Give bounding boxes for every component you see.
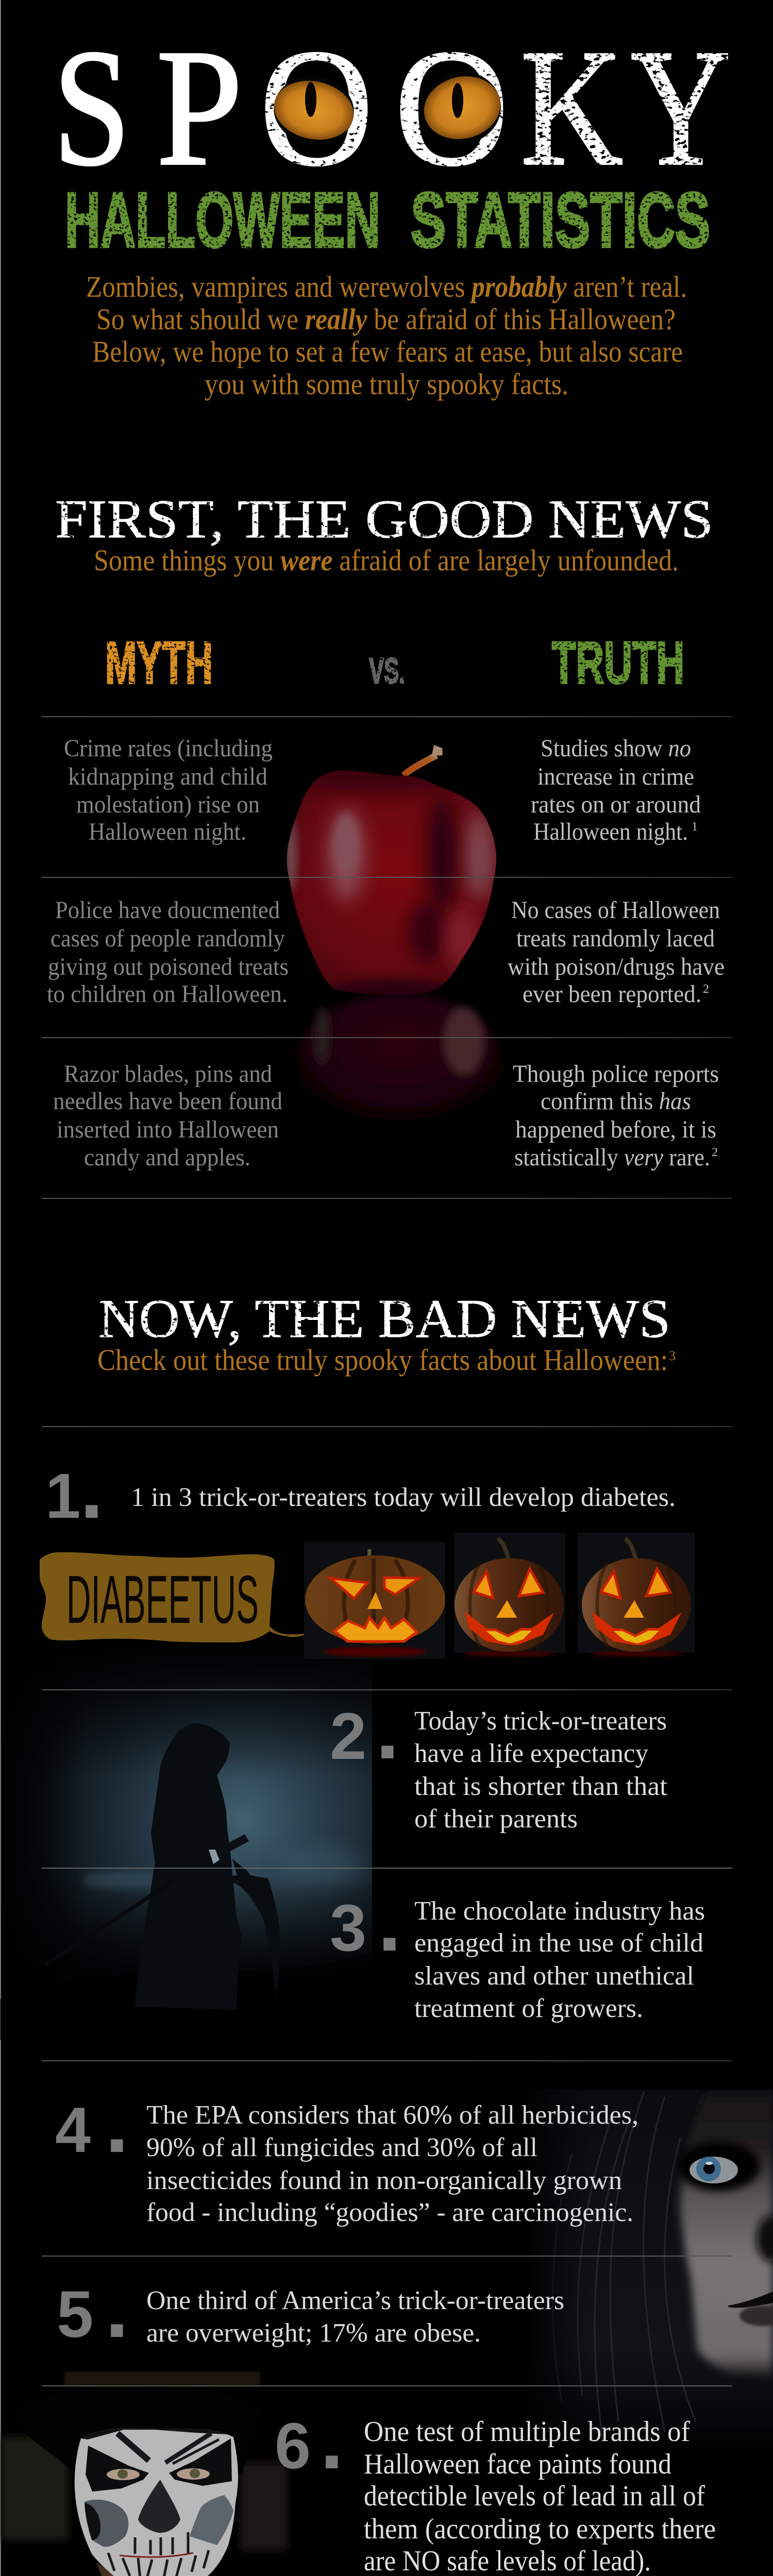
title: SPOOKY: Y [631,15,731,200]
illustration: apple reflection [296,993,502,1132]
fact 2 text: have a life expectancy [414,1739,648,1768]
fact 2 text: that is shorter than that [414,1772,668,1801]
panel: myth vs truth row 1: Halloween night. [89,818,246,845]
fact 3 number: 3 [330,1891,366,1965]
fact 5 text [146,2286,564,2348]
title: SPOOKY: K [520,15,623,200]
fact 6 text [364,2416,716,2576]
fact 4 number: . [105,2075,129,2170]
fact 3 number: . [378,1874,401,1969]
panel: myth vs truth row 2: treats randomly laced [516,925,715,952]
fact 6 text: detectible levels of lead in all of [364,2480,705,2512]
fact 6 text: them (according to experts there [364,2513,716,2545]
panel: myth vs truth row 2: cases of people randomly [51,925,285,952]
subheading: bad news: 3 [669,1348,676,1363]
icon: right cat eye [417,66,507,149]
fact 2 text: of their parents [414,1804,578,1834]
fact 3 number [330,1874,401,1969]
fact 3 text: engaged in the use of child [414,1928,703,1958]
fact 4 number [55,2075,129,2170]
title: SPOOKY: P [156,15,243,200]
panel: myth vs truth row 3: statistically very rare. [514,1144,710,1171]
panel: myth vs truth row 1: Studies show no [541,735,691,762]
title: SPOOKY: O [395,15,509,200]
panel: myth vs truth row 1 [64,735,701,845]
illustration: pumpkin 2 [454,1533,565,1657]
panel: myth vs truth row 1: Crime rates (including [64,735,273,762]
intro text: So what should we really be afraid of this Halloween? [96,302,676,336]
panel: myth vs truth row 3: Razor blades, pins and [64,1060,272,1088]
illustration: woman's face photo [528,2090,773,2458]
intro text: you with some truly spooky facts. [205,367,568,401]
fact 3 text [414,1896,705,2023]
fact 5 number: 5 [57,2278,93,2351]
illustration: skull face paint photo [1,2371,288,2576]
panel: myth vs truth row 1: 1 [692,820,698,834]
panel: myth vs truth row 1: rates on or around [531,791,701,818]
heading: first, the good news: FIRST, THE GOOD NEWS [55,489,713,549]
illustration: pumpkin 1 [304,1542,445,1659]
panel: myth vs truth row 2: giving out poisoned treats [48,953,289,980]
fact 2 number: . [376,1682,399,1776]
intro text [86,270,687,401]
illustration: red apple with stem [287,745,497,995]
panel: myth vs truth row 2: ever been reported. [523,980,701,1008]
panel: myth vs truth row 1: increase in crime [537,763,694,790]
subheading: good news: Some things you were afraid of are largely unfounded. [94,544,679,577]
panel: myth vs truth row 3: 2 [712,1146,718,1159]
fact 6 number: 6 [275,2410,311,2482]
subheading: bad news: Check out these truly spooky facts about Halloween: [97,1343,668,1377]
fact 4 text: insecticides found in non-organically grown [146,2166,622,2195]
panel: myth vs truth row 1: Halloween night. [533,818,688,845]
fact 3 text: slaves and other unethical [414,1961,694,1991]
panel: myth vs truth row 2: No cases of Halloween [511,896,720,924]
title: SPOOKY [53,15,731,200]
fact 3 text: treatment of growers. [414,1994,643,2023]
illustration: pumpkin 3 [578,1533,695,1657]
panel: myth vs truth row 3: confirm this has [541,1088,691,1115]
speech bubble: diabeetus [40,1552,309,1642]
fact 4 text: food - including “goodies” - are carcinogenic. [146,2198,633,2227]
fact 6 text: Halloween face paints found [364,2448,671,2480]
fact 6 text: One test of multiple brands of [364,2416,690,2448]
fact 2 number [330,1682,399,1776]
subtitle: Halloween Statistics: HALLOWEEN [65,176,380,263]
heading: now, the bad news: NOW, THE BAD NEWS [98,1289,670,1349]
panel: myth vs truth row 3 [53,1060,719,1171]
panel: myth vs truth row 3: inserted into Halloween [57,1116,279,1143]
panel: myth vs truth row 3: Though police reports [513,1060,719,1088]
panel: myth vs truth row 2: to children on Halloween. [47,980,288,1008]
fact 2 number: 2 [330,1700,366,1773]
illustration: grim reaper photo [0,1633,372,2056]
fact 5 number: . [105,2260,129,2355]
speech bubble: diabeetus: DIABEETUS [66,1562,259,1637]
fact 1 number [45,1441,104,1536]
label: myth: MYTH [105,630,213,696]
title: SPOOKY: S [53,15,130,200]
fact 5 number [57,2260,129,2355]
panel: myth vs truth row 2: Police have doucmented [55,896,280,924]
fact 1 number: 1 [45,1461,80,1532]
fact 1 number: . [80,1441,104,1536]
fact 4 text: 90% of all fungicides and 30% of all [146,2133,537,2162]
panel: myth vs truth row 3: needles have been found [53,1088,282,1115]
intro text: Zombies, vampires and werewolves probably aren’t real. [86,270,687,303]
panel: myth vs truth row 1: kidnapping and child [68,763,267,790]
fact 2 text [414,1706,668,1834]
fact 4 number: 4 [55,2095,91,2166]
title: SPOOKY: O [260,15,373,200]
panel: myth vs truth row 2: 2 [703,982,709,996]
label: vs: VS. [369,651,405,691]
icon: left cat eye [268,71,359,149]
fact 2 text: Today’s trick-or-treaters [414,1706,667,1736]
panel: myth vs truth row 1: molestation) rise on [76,791,260,818]
fact 3 text: The chocolate industry has [414,1896,705,1926]
intro text: Below, we hope to set a few fears at ease, but also scare [92,335,683,368]
fact 5 text: One third of America’s trick-or-treaters [146,2286,564,2315]
fact 5 text: are overweight; 17% are obese. [146,2318,481,2348]
panel: myth vs truth row 3: happened before, it is [515,1116,716,1143]
fact 4 text [146,2100,638,2227]
panel: myth vs truth row 2: with poison/drugs have [508,953,725,980]
fact 6 number [275,2392,344,2486]
label: truth: TRUTH [552,630,684,696]
fact 4 text: The EPA considers that 60% of all herbicides, [146,2100,638,2130]
panel: myth vs truth row 2 [47,896,725,1008]
panel: myth vs truth row 3: candy and apples. [84,1144,250,1171]
fact 1 text: 1 in 3 trick-or-treaters today will develop diabetes. [131,1483,676,1512]
fact 6 number: . [320,2392,344,2486]
